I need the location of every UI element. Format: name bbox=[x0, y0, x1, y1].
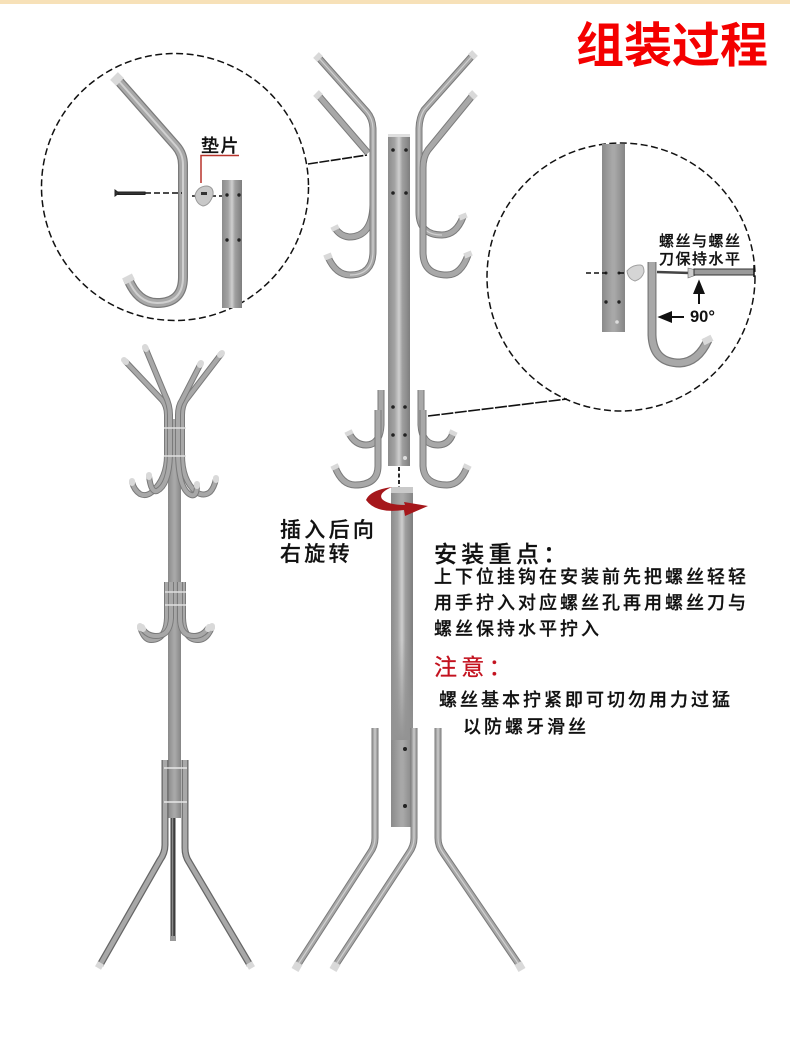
rack foot bracket highlights bbox=[164, 768, 187, 802]
hook in left circle bbox=[114, 76, 183, 303]
rack mid hooks bbox=[140, 582, 212, 640]
hook right bbox=[652, 262, 709, 363]
leader line to upper hooks bbox=[308, 155, 367, 164]
left leg bbox=[295, 728, 375, 970]
text block: installation notes: 上下位挂钩在安装前先把螺丝轻轻 bbox=[434, 566, 749, 587]
full assembled coat rack bbox=[98, 347, 252, 968]
label: screw horizontal bbox=[659, 233, 742, 268]
label: insert then rotate: 插入后向 bbox=[280, 519, 377, 542]
main rack: lower section bbox=[295, 487, 522, 970]
lower-left hooks bbox=[334, 390, 381, 485]
post section bbox=[222, 180, 242, 308]
washer bbox=[195, 186, 213, 206]
text block: caution: 螺丝基本拧紧即可切勿用力过猛 bbox=[439, 690, 733, 710]
upper post bbox=[388, 134, 410, 466]
dashed circle left bbox=[42, 54, 308, 320]
screw bbox=[115, 190, 145, 196]
rack back middle leg bbox=[170, 818, 176, 938]
alignment dashes between posts bbox=[398, 467, 400, 487]
top beige strip bbox=[0, 0, 790, 4]
post section right bbox=[602, 144, 625, 332]
heading: caution: 注意： bbox=[434, 654, 516, 680]
panel: right detail circle bbox=[487, 143, 755, 411]
lower post bbox=[391, 487, 413, 827]
label: insert then rotate bbox=[280, 519, 377, 566]
panel: left detail circle bbox=[42, 54, 308, 320]
right upper hooks bbox=[419, 53, 475, 275]
dashed circle right bbox=[487, 143, 755, 411]
text block: caution: 以防螺牙滑丝 bbox=[463, 717, 589, 737]
rack top arms bbox=[124, 347, 222, 495]
left upper hooks bbox=[316, 55, 373, 275]
label: insert then rotate: 右旋转 bbox=[280, 543, 353, 566]
arrow left bbox=[660, 312, 684, 322]
text block: installation notes: 螺丝保持水平拧入 bbox=[434, 619, 602, 639]
right leg bbox=[438, 728, 522, 970]
middle leg bbox=[333, 728, 414, 970]
dashed guide line bbox=[145, 193, 222, 196]
rack left leg bbox=[98, 760, 165, 968]
washer right bbox=[627, 265, 644, 281]
text block: caution bbox=[434, 654, 733, 737]
label: washer bbox=[201, 136, 240, 183]
main rack: upper section bbox=[316, 53, 475, 485]
label: 90 degrees: 90° bbox=[690, 308, 715, 326]
rack mid bracket highlights bbox=[165, 592, 186, 605]
arrow up bbox=[694, 282, 704, 304]
title: 组装过程 bbox=[576, 20, 768, 73]
leader line to lower hooks bbox=[428, 399, 567, 416]
text block: installation notes bbox=[434, 541, 749, 639]
lower-right hooks bbox=[421, 390, 468, 485]
heading: installation key points: 安装重点： bbox=[434, 541, 570, 567]
rack right leg bbox=[185, 760, 252, 968]
label: washer: 垫片 bbox=[201, 136, 240, 156]
rack top bracket highlights bbox=[164, 428, 186, 456]
label: screw horizontal: 刀保持水平 bbox=[659, 251, 742, 268]
dashed guide line right bbox=[586, 272, 640, 274]
label: screw horizontal: 螺丝与螺丝 bbox=[659, 233, 742, 250]
rack central post bbox=[168, 419, 181, 818]
text block: installation notes: 用手拧入对应螺丝孔再用螺丝刀与 bbox=[434, 592, 749, 613]
rotation arrow bbox=[366, 487, 428, 516]
screw and screwdriver bbox=[657, 265, 754, 278]
